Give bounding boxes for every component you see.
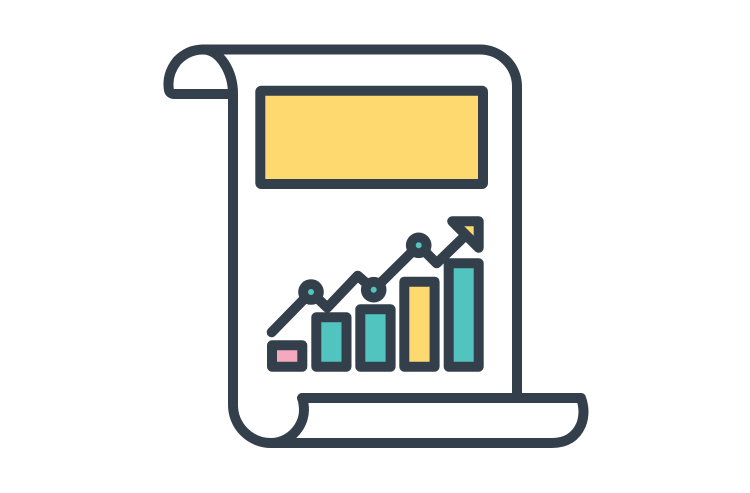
data point three	[406, 232, 432, 258]
paper scroll outline	[168, 50, 583, 443]
top curl	[168, 50, 271, 443]
title placeholder panel	[260, 91, 483, 184]
arrowhead	[452, 221, 479, 248]
bar chart	[272, 263, 479, 367]
bar four: yellow	[404, 282, 435, 367]
trend line with arrow	[272, 221, 479, 332]
data point two	[361, 277, 387, 303]
bar five: teal	[449, 263, 479, 367]
data point one	[298, 279, 324, 305]
bar one: pink	[272, 345, 302, 367]
bottom curl	[271, 398, 584, 443]
bar three: teal	[360, 309, 391, 367]
trend line	[272, 233, 468, 332]
scroll body	[203, 50, 517, 398]
bar two: teal	[316, 317, 346, 367]
